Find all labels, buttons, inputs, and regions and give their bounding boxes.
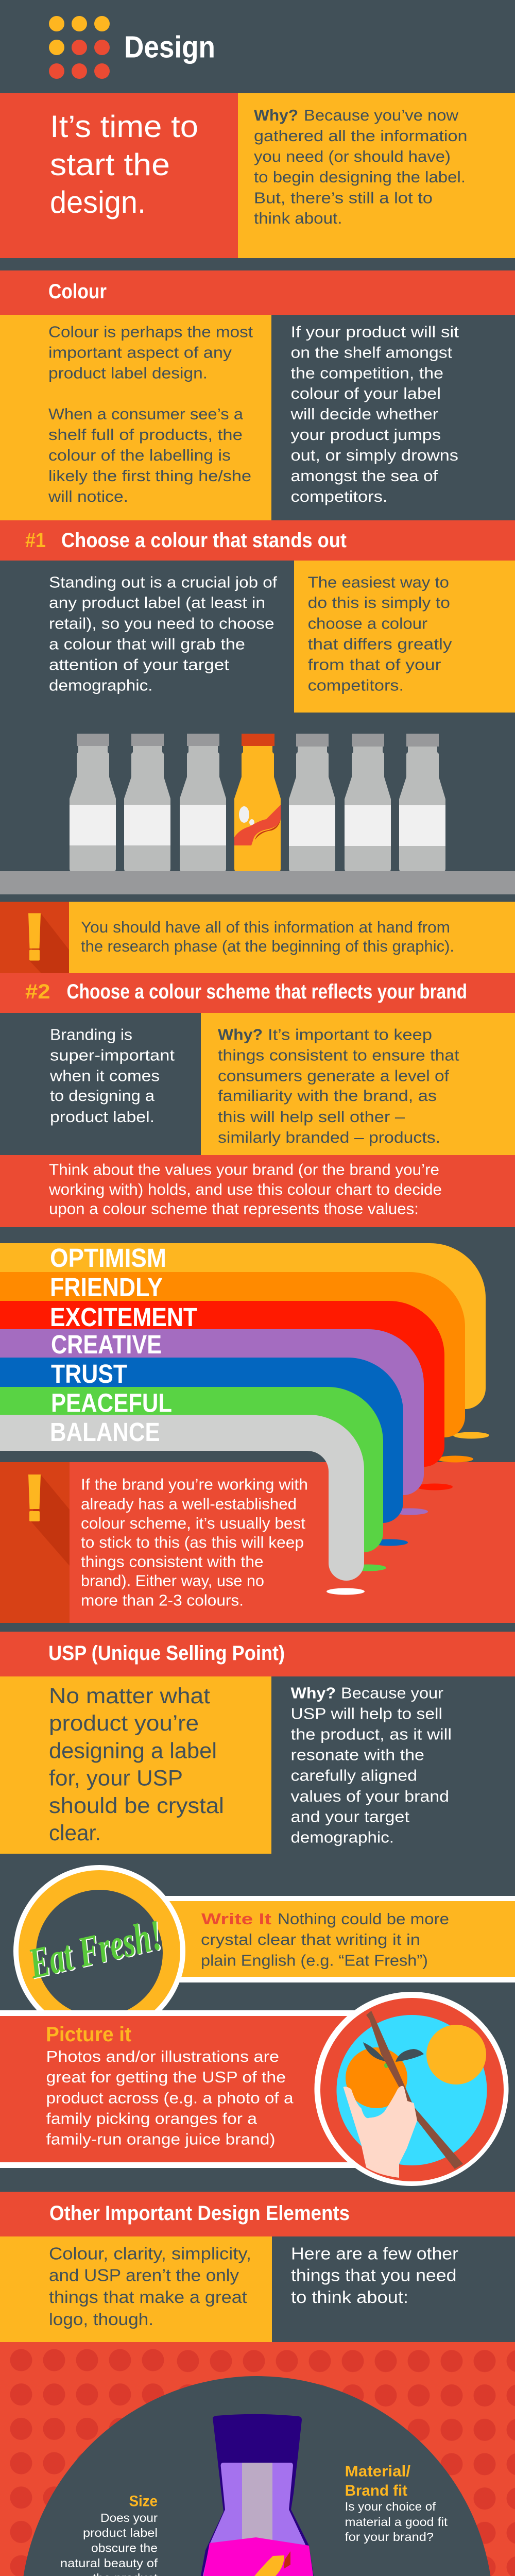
text block: why USP: values of your brand: [290, 1787, 449, 1805]
band: optimism: [0, 1243, 486, 1409]
panel: colour right: [271, 315, 515, 520]
why text: you need (or should have): [254, 147, 451, 165]
text block: size: product label: [83, 2526, 158, 2539]
callout text: colour scheme, it’s usually best: [81, 1514, 305, 1532]
callout text: brand). Either way, use no: [81, 1572, 264, 1590]
why text: But, there’s still a lot to: [254, 189, 433, 207]
panel: it's time to start the design: [0, 93, 238, 258]
text block: great for getting the USP of the: [46, 2068, 286, 2086]
why text: think about.: [254, 209, 342, 227]
text block: super-important: [50, 1046, 175, 1064]
text block: when it comes: [49, 1066, 160, 1084]
heading: #2 choose a colour scheme: #2: [25, 980, 50, 1003]
large text: product you’re: [49, 1711, 199, 1736]
text block: material / brand fit: material a good fit: [345, 2515, 448, 2529]
large text: designing a label: [49, 1739, 217, 1764]
heading: USP: USP (Unique Selling Point): [48, 1642, 285, 1665]
text block: [308, 573, 452, 694]
large text: clear.: [49, 1821, 101, 1845]
bottle glass: [195, 2463, 319, 2576]
text block: standing out: Standing out is a crucial job of: [49, 573, 277, 591]
band: friendly: [0, 1272, 465, 1437]
text block: why USP: and your target: [290, 1808, 409, 1826]
callout: brand tip: [28, 1475, 308, 1609]
text block: crystal clear that writing it in: [201, 1930, 420, 1948]
text block: Branding is: [50, 1026, 132, 1044]
text block: standing out: retail), so you need to choose: [49, 615, 274, 633]
why text: [254, 106, 468, 227]
text block: out, or simply drowns: [290, 446, 458, 464]
text block: why USP: Because your: [341, 1684, 443, 1702]
bottle 1: [70, 734, 116, 871]
text block: other elements right: Here are a few other: [291, 2244, 458, 2263]
band: balance: [0, 1415, 364, 1581]
callout text: the research phase (at the beginning of this graphic).: [81, 937, 454, 955]
panel: colour left: [0, 315, 271, 520]
text block: product across (e.g. a photo of a: [46, 2089, 294, 2107]
text block: to designing a: [50, 1087, 155, 1105]
header: Design: [0, 0, 515, 93]
chart: colour values rainbow: [0, 1243, 489, 1595]
text block: familiarity with the brand, as: [218, 1087, 437, 1105]
text block: material / brand fit: Material/: [345, 2463, 411, 2480]
text block: plain English (e.g. “Eat Fresh”): [201, 1952, 428, 1969]
text block: family-run orange juice brand): [46, 2130, 275, 2148]
text block: Photos and/or illustrations are: [46, 2047, 279, 2065]
panel: easiest way: [294, 561, 515, 713]
orange, right: [426, 2025, 486, 2084]
icon: exclamation mark: [28, 1475, 70, 1566]
callout text: You should have all of this information at hand from: [81, 918, 450, 936]
glass highlights: [242, 2463, 272, 2576]
text block: size: Does your: [100, 2511, 158, 2524]
text block: standing out: any product label (at least in: [49, 594, 265, 612]
text block: shelf full of products, the: [48, 426, 243, 444]
illustration: juice bottle: [191, 2414, 323, 2576]
text block: material / brand fit: [345, 2463, 448, 2544]
panel: other elements left: [0, 2236, 272, 2342]
text block: size: [60, 2493, 158, 2576]
text block: working with) holds, and use this colour chart to decide: [48, 1180, 442, 1198]
band: optimism: OPTIMISM: [50, 1243, 166, 1273]
panel: why consistency: [201, 1013, 515, 1155]
text block: Why?: [218, 1026, 263, 1044]
text block: consumers generate a level of: [218, 1066, 449, 1084]
text block: Colour is perhaps the most: [48, 323, 253, 341]
band: balance: BALANCE: [50, 1417, 160, 1447]
panel: USP statement: [0, 1676, 271, 1854]
text block: [48, 1161, 442, 1218]
band: peaceful: [0, 1387, 383, 1552]
text block: other elements right: to think about:: [291, 2287, 408, 2307]
text block: similarly branded – products.: [218, 1128, 440, 1146]
eat fresh slogan: Eat Fresh!: [25, 1911, 168, 1989]
text block: why USP: demographic.: [290, 1828, 394, 1846]
heading: #1 choose a colour: [0, 520, 515, 561]
band: excitement: EXCITEMENT: [50, 1302, 197, 1332]
large text: No matter what: [49, 1684, 210, 1708]
leaves: [363, 2042, 424, 2062]
shelf: [0, 871, 515, 894]
text block: this will help sell other –: [218, 1108, 405, 1126]
eat fresh slogan: [24, 1911, 168, 1989]
text block: [48, 323, 253, 505]
callout: research phase: [0, 902, 515, 973]
heading: Colour: [0, 270, 515, 315]
icon: orange picking illustration: [314, 1992, 509, 2186]
text block: likely the first thing he/she: [48, 467, 251, 485]
callout text: to stick to this (as this will keep: [81, 1533, 304, 1551]
panel: why intro: [238, 93, 515, 258]
heading: Colour: Colour: [48, 280, 107, 303]
text block: upon a colour scheme that represents those values:: [49, 1200, 419, 1218]
large text: for, your USP: [49, 1766, 183, 1791]
band: friendly: FRIENDLY: [50, 1273, 163, 1302]
text block: why USP: resonate with the: [290, 1746, 424, 1764]
text block: size: Size: [129, 2493, 158, 2510]
text block: material / brand fit: for your brand?: [345, 2530, 434, 2544]
intro headline: It’s time to: [50, 109, 198, 144]
text block: why USP: USP will help to sell: [290, 1704, 442, 1723]
why text: Why?: [254, 106, 298, 124]
text block: The easiest way to: [308, 573, 449, 591]
text block: why USP: carefully aligned: [290, 1766, 417, 1785]
text block: important aspect of any: [48, 343, 232, 361]
band: trust: [0, 1358, 403, 1523]
text block: your product jumps: [290, 426, 441, 444]
text block: It’s important to keep: [268, 1026, 432, 1044]
icon: exclamation mark: [0, 902, 69, 973]
text block: do this is simply to: [308, 594, 450, 612]
bottle 2: [124, 734, 170, 871]
text block: why USP: Why?: [290, 1684, 336, 1702]
callout text: If the brand you’re working with: [81, 1476, 308, 1494]
text block: product label.: [50, 1108, 154, 1126]
title: Design: [124, 30, 215, 64]
text block: why USP: the product, as it will: [290, 1725, 452, 1743]
panel: dotted red background: [0, 2342, 515, 2576]
band: creative: [0, 1329, 424, 1495]
branch: [366, 2011, 463, 2169]
callout text: things consistent with the: [81, 1553, 264, 1570]
text block: colour of your label: [290, 384, 441, 402]
panel: branding: [0, 1013, 201, 1155]
band: excitement: [0, 1301, 444, 1467]
large text: [49, 1684, 224, 1845]
band: peaceful: PEACEFUL: [51, 1388, 172, 1418]
text block: other elements right: things that you need: [291, 2266, 456, 2285]
orange, left: [346, 2047, 407, 2108]
text block: [290, 323, 459, 505]
heading: other important design elements: Other Important Design Elements: [49, 2202, 350, 2225]
text block: things that make a great: [49, 2287, 247, 2307]
text block: Picture it: [46, 2023, 131, 2046]
text block: will notice.: [48, 487, 128, 505]
icon: eat fresh badge: [13, 1865, 185, 2037]
text block: colour of the labelling is: [48, 446, 231, 464]
text block: product label design.: [48, 364, 208, 382]
heading: other important design elements: [0, 2192, 515, 2236]
text block: Colour, clarity, simplicity,: [49, 2244, 251, 2263]
text block: material / brand fit: Brand fit: [345, 2482, 407, 2499]
text block: Write It: [201, 1910, 271, 1928]
heading: USP: [0, 1632, 515, 1676]
intro headline: start the: [50, 147, 170, 182]
why text: to begin designing the label.: [254, 168, 466, 186]
text block: Think about the values your brand (or the brand you’re: [49, 1161, 439, 1179]
text block: on the shelf amongst: [290, 343, 452, 361]
text block: competitors.: [308, 676, 404, 694]
text block: other elements right: [291, 2244, 458, 2307]
panel: dark circle: [21, 2376, 493, 2576]
intro headline: [50, 109, 198, 219]
bottle 5: [289, 734, 335, 871]
band: trust: TRUST: [51, 1359, 127, 1388]
intro headline: design.: [50, 185, 146, 219]
text block: Nothing could be more: [278, 1910, 449, 1928]
text block: and USP aren’t the only: [49, 2266, 239, 2285]
panel: write it: [154, 1896, 515, 1982]
text block: If your product will sit: [290, 323, 459, 341]
text block: material / brand fit: Is your choice of: [345, 2500, 436, 2513]
text block: family picking oranges for a: [46, 2109, 258, 2127]
bottle 7: [399, 734, 445, 871]
text block: [218, 1026, 459, 1146]
callout text: more than 2-3 colours.: [81, 1591, 244, 1609]
callout text: already has a well-established: [81, 1495, 297, 1513]
panel: think about values: [0, 1155, 515, 1227]
text block: why USP: [290, 1684, 452, 1846]
drip shadows: [327, 1432, 489, 1595]
bottle 6: [345, 734, 391, 871]
text block: When a consumer see’s a: [48, 405, 244, 423]
text block: logo, though.: [49, 2310, 153, 2329]
text block: standing out: demographic.: [49, 676, 152, 694]
why text: Because you’ve now: [304, 106, 459, 124]
heading: #2 choose a colour scheme: [0, 973, 515, 1013]
hand: [343, 2086, 417, 2178]
text block: [46, 2023, 294, 2148]
bottle outline: [191, 2414, 323, 2576]
bottle 4: standout orange: [234, 734, 281, 871]
text block: that differs greatly: [308, 635, 452, 653]
heading: #1 choose a colour: #1: [25, 529, 46, 552]
text block: [49, 1026, 175, 1126]
text block: [49, 2244, 251, 2329]
text block: standing out: attention of your target: [49, 656, 229, 674]
text block: standing out: [49, 573, 277, 694]
icon: label swoosh: [227, 2551, 290, 2576]
text block: amongst the sea of: [290, 467, 438, 485]
text block: from that of your: [308, 656, 441, 674]
eat fresh slogan: Eat Fresh!: [24, 1911, 167, 1988]
large text: should be crystal: [49, 1793, 224, 1818]
callout text: [81, 918, 454, 955]
text block: size: natural beauty of: [60, 2556, 158, 2570]
text block: standing out: a colour that will grab the: [49, 635, 245, 653]
text block: choose a colour: [308, 615, 427, 633]
band: creative: CREATIVE: [51, 1330, 162, 1359]
text block: competitors.: [290, 487, 387, 505]
text block: size: obscure the: [91, 2541, 158, 2555]
bottle 3: [180, 734, 226, 871]
icon: dot grid: [49, 16, 110, 79]
panel: picture it: [0, 2010, 371, 2168]
text block: things consistent to ensure that: [218, 1046, 459, 1064]
callout text: [81, 1476, 308, 1609]
text block: will decide whether: [290, 405, 438, 423]
illustration: bottles on shelf: [0, 734, 515, 894]
why text: gathered all the information: [254, 127, 468, 145]
panel: brand tip background: [0, 1462, 515, 1623]
text block: the competition, the: [290, 364, 443, 382]
product label: [193, 2537, 321, 2576]
text block: [201, 1910, 449, 1969]
heading: #1 choose a colour: Choose a colour that stands out: [61, 529, 347, 552]
